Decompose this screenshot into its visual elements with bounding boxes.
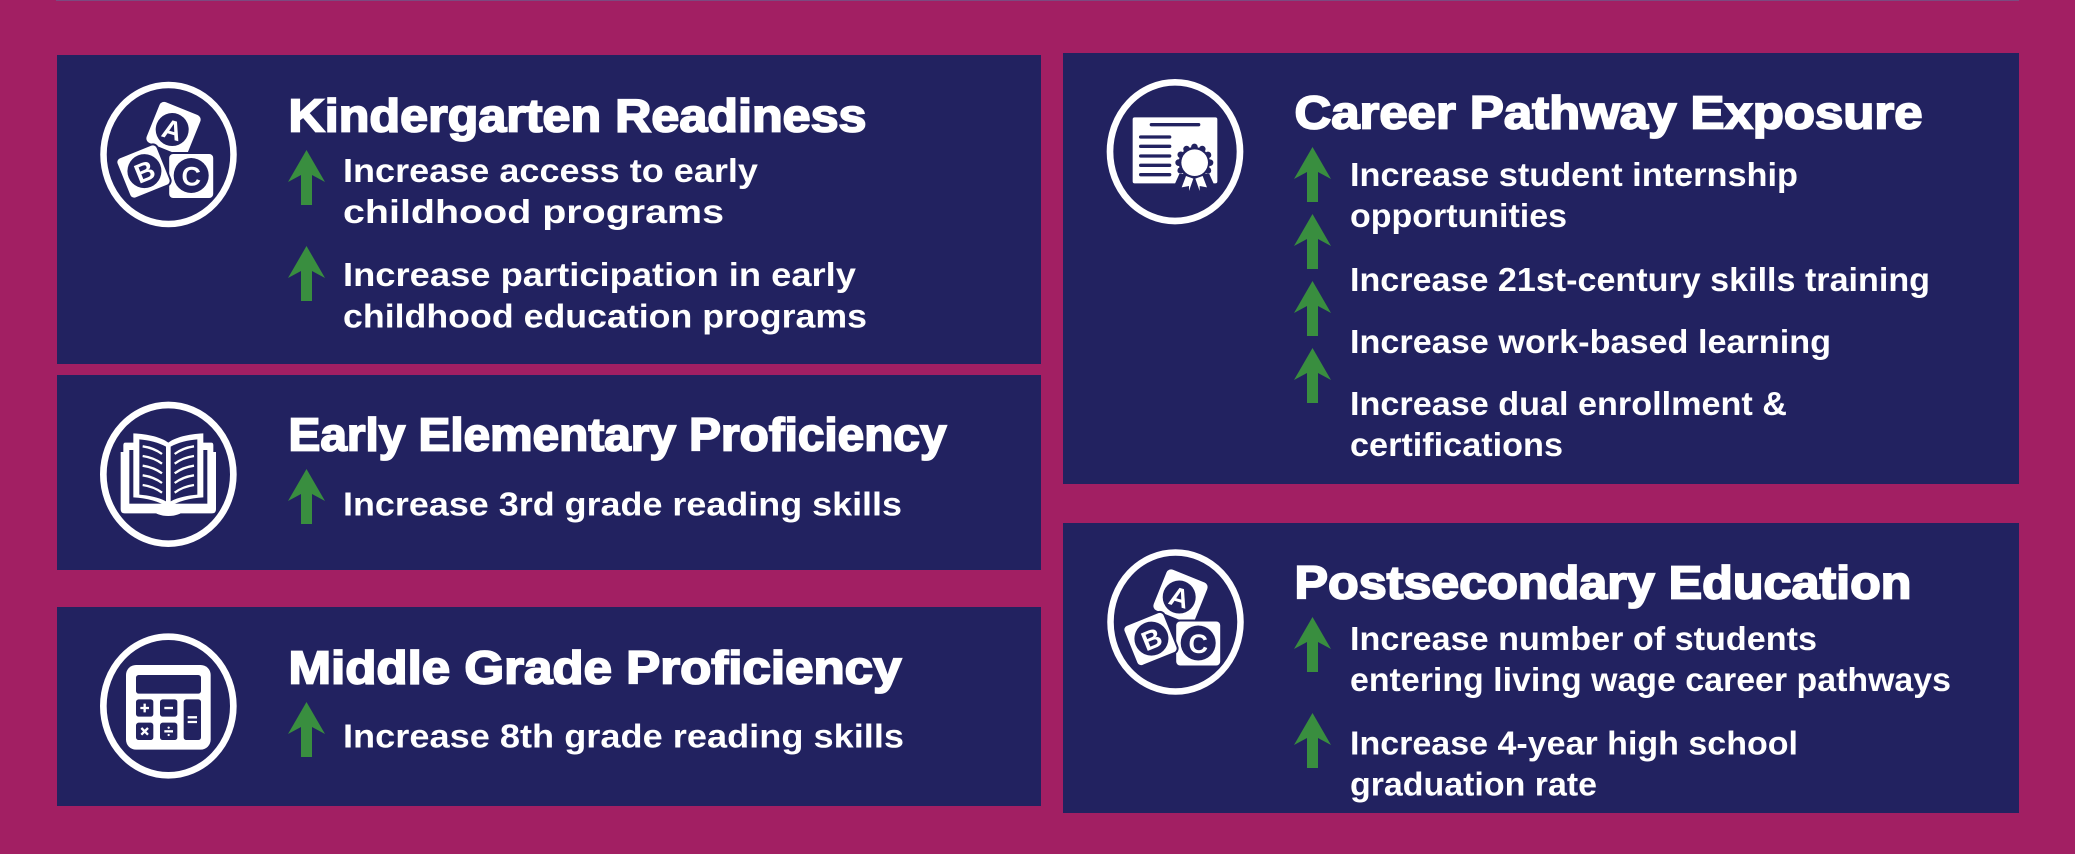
text: graduation rate: Increase 4-year high school <box>1350 724 1798 762</box>
text: internship <box>1350 156 1798 234</box>
text: dual enrollment: Increase dual enrollment & <box>1350 385 1787 422</box>
panel: career pathway exposure <box>1063 53 2019 484</box>
text: living wage pathways: Increase number of students <box>1350 620 1817 657</box>
arrow up <box>1294 348 1331 403</box>
text: living wage pathways <box>1350 620 1951 698</box>
arrow up <box>1294 281 1331 336</box>
arrow up <box>1294 147 1331 202</box>
arrow up <box>1294 214 1331 269</box>
text: reading skills: Increase 8th grade reading skills <box>343 718 904 754</box>
heading: Middle Grade Proficiency <box>288 642 902 694</box>
text: participation: Increase participation in early <box>343 256 857 293</box>
text: internship: opportunities <box>1350 197 1567 234</box>
arrow up <box>1294 713 1331 768</box>
icon: certificate <box>1110 82 1240 221</box>
text: dual enrollment <box>1350 385 1787 463</box>
arrow up <box>288 702 325 757</box>
text: graduation rate: graduation rate <box>1350 766 1597 802</box>
panel: postsecondary education <box>1063 523 2019 813</box>
heading: Early Elementary Proficiency <box>288 408 947 460</box>
heading: Postsecondary Education <box>1294 556 1912 608</box>
text: participation: childhood education programs <box>343 298 867 334</box>
icon: alphabet blocks: A <box>159 113 186 147</box>
panel: middle grade proficiency <box>57 607 1041 806</box>
arrow up <box>1294 617 1331 672</box>
arrow up <box>288 246 325 301</box>
text: participation <box>343 256 867 334</box>
text: early childhood programs: childhood programs <box>343 193 724 230</box>
icon: alphabet blocks: A <box>1166 581 1193 615</box>
text: internship: Increase student internship <box>1350 156 1798 193</box>
text: graduation rate <box>1350 724 1798 802</box>
icon: alphabet blocks: C <box>1188 629 1208 659</box>
text: early childhood programs: Increase access to early <box>343 152 759 189</box>
icon: alphabet blocks <box>104 85 234 224</box>
panel: kindergarten readiness <box>57 55 1041 364</box>
heading: Kindergarten Readiness <box>288 90 866 142</box>
icon: alphabet blocks: B <box>130 154 159 190</box>
text: dual enrollment: certifications <box>1350 426 1563 463</box>
text: work-based learning: Increase work-based learning <box>1350 323 1831 360</box>
icon: alphabet blocks: C <box>181 162 201 192</box>
icon: alphabet blocks <box>1110 552 1240 692</box>
panel: early elementary proficiency <box>57 375 1041 570</box>
text: early childhood programs <box>343 152 759 230</box>
icon: open book <box>103 405 233 544</box>
icon: alphabet blocks: B <box>1137 622 1166 657</box>
arrow up <box>288 150 325 205</box>
icon: calculator <box>103 637 233 775</box>
arrow up <box>288 469 325 524</box>
text: reading skills: Increase 3rd grade reading skills <box>343 486 902 522</box>
heading: Career Pathway Exposure <box>1294 86 1922 138</box>
text: living wage pathways: entering living wage career pathways <box>1350 661 1951 698</box>
text: skills training: Increase 21st-century skills training <box>1350 261 1930 298</box>
